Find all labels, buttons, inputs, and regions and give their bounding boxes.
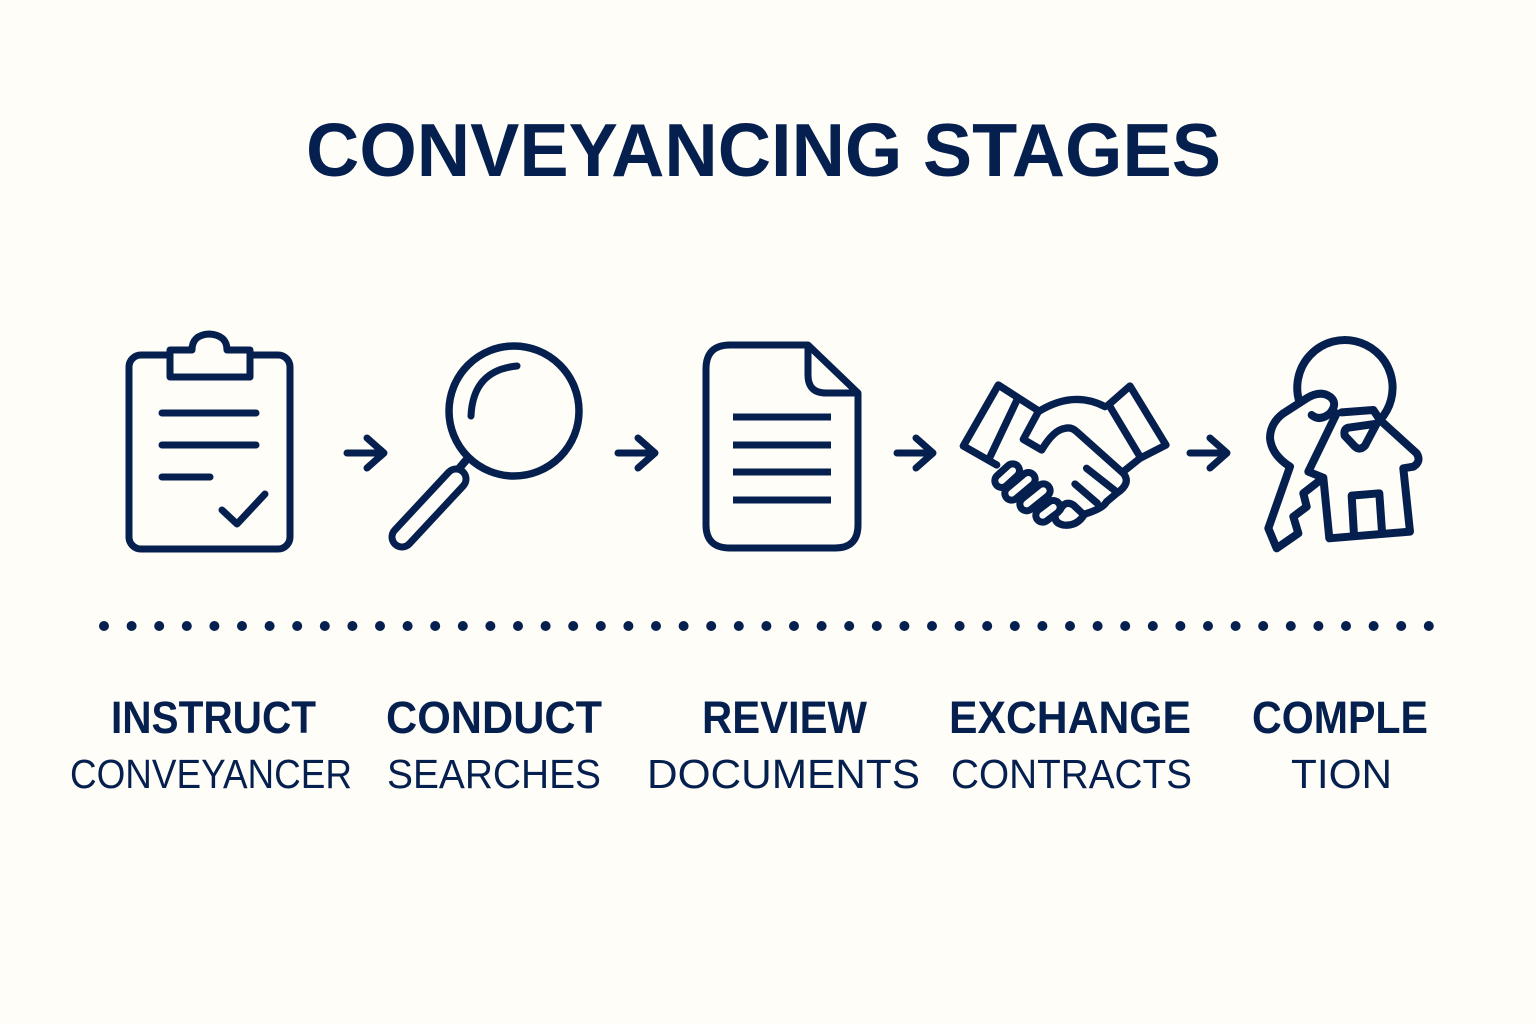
label: instruct conveyancer: INSTRUCT — [111, 692, 316, 743]
label: review documents — [647, 692, 920, 797]
label: instruct conveyancer — [70, 692, 352, 797]
label: completion — [1252, 692, 1428, 797]
icon: document — [706, 345, 858, 548]
dotted divider — [104, 621, 1430, 631]
label: conduct searches: CONDUCT — [386, 692, 602, 743]
label: completion: COMPLE — [1252, 692, 1428, 743]
title: CONVEYANCING STAGES — [306, 108, 1221, 192]
label: review documents: DOCUMENTS — [647, 751, 920, 797]
label: instruct conveyancer: CONVEYANCER — [70, 751, 352, 797]
label: exchange contracts: CONTRACTS — [951, 751, 1192, 797]
label: conduct searches: SEARCHES — [387, 751, 601, 797]
arrow 3 — [897, 438, 933, 468]
label: completion: TION — [1291, 751, 1392, 797]
icon: magnifying glass — [402, 346, 579, 537]
label: review documents: REVIEW — [702, 692, 867, 743]
label: exchange contracts: EXCHANGE — [949, 692, 1191, 743]
label: conduct searches — [386, 692, 602, 797]
icon: house keys — [1268, 340, 1419, 548]
icon: handshake — [963, 385, 1166, 525]
arrow 4 — [1190, 438, 1227, 468]
arrow 1 — [347, 438, 384, 468]
icon: clipboard with checklist — [129, 334, 290, 549]
label: exchange contracts — [949, 692, 1192, 797]
arrow 2 — [618, 438, 655, 468]
